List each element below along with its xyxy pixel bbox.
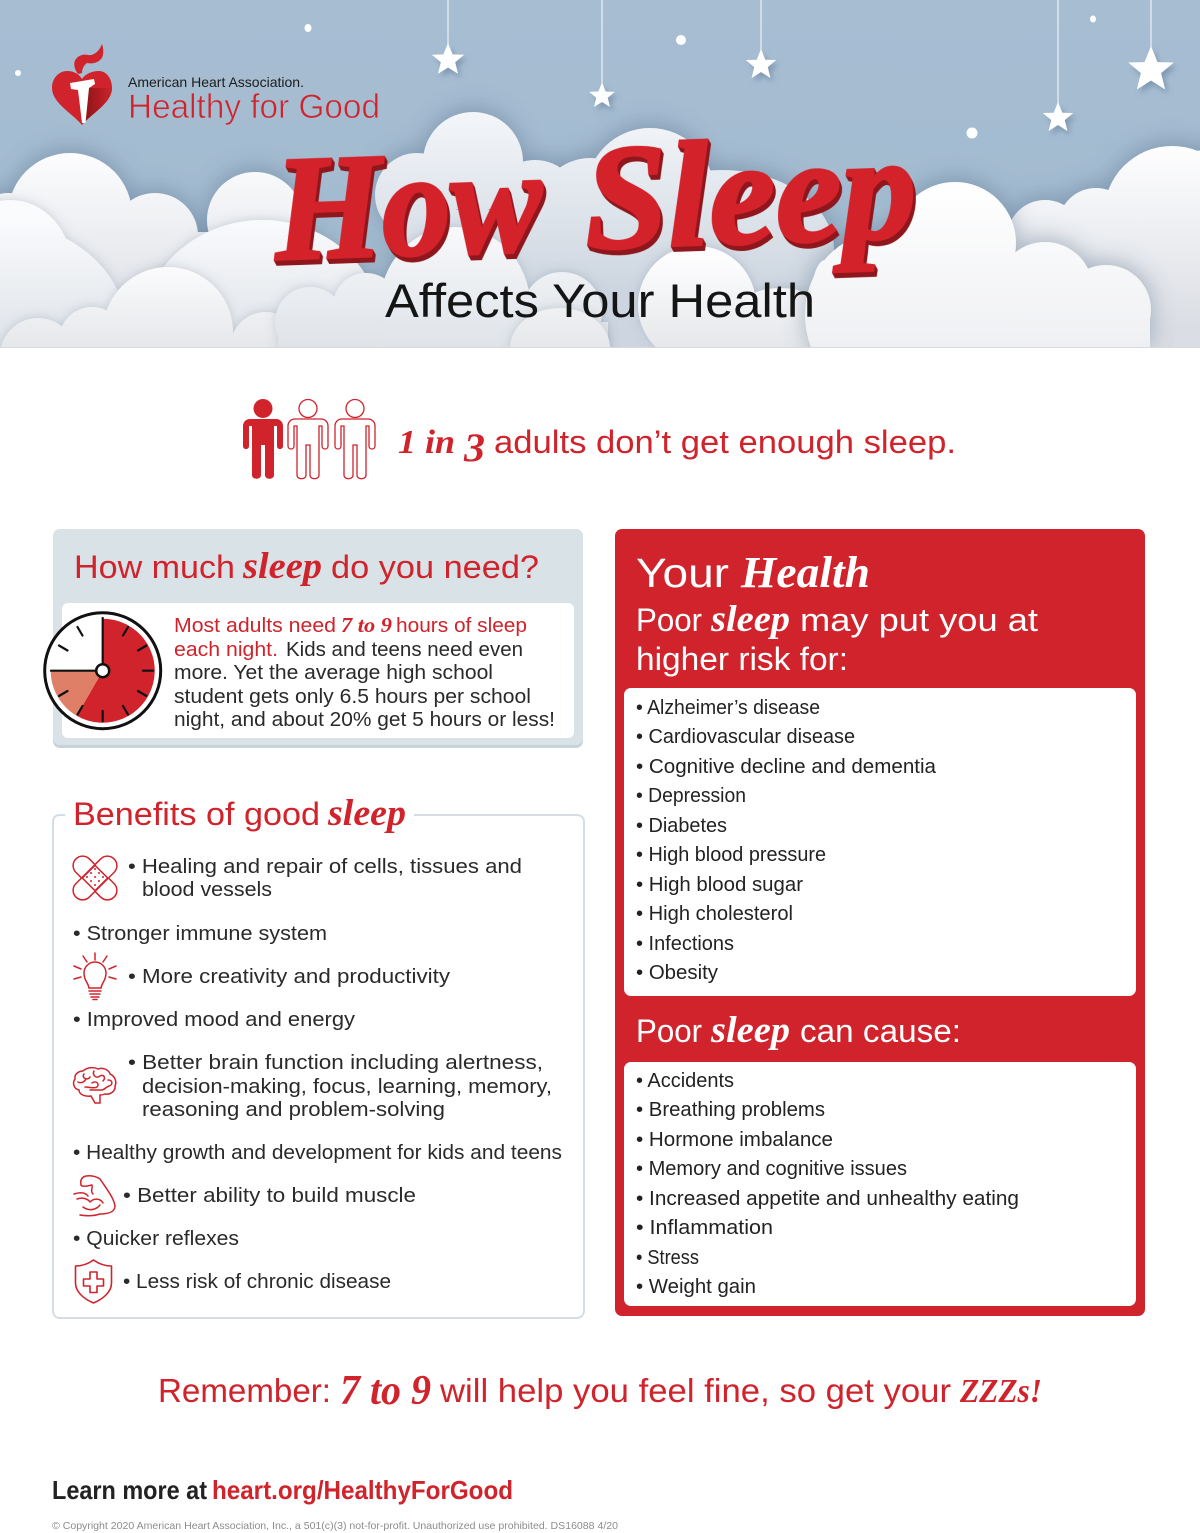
subheading: poor sleep can cause: Poor xyxy=(636,1013,702,1049)
logo: American Heart Association Healthy for Good: Healthy for Good xyxy=(128,88,380,126)
subheading: poor sleep risk xyxy=(636,599,1038,677)
list: causes: • Memory and cognitive issues xyxy=(636,1157,907,1180)
list: risks: • Depression xyxy=(636,784,746,807)
icon: light bulb xyxy=(74,953,116,1000)
title: How Sleep: Sleep xyxy=(581,104,919,281)
statistic: 1 in 3 adults: adults don’t get enough sleep. xyxy=(494,424,956,460)
icon: heart and torch xyxy=(52,44,112,125)
text: sleep needs: Kids and teens need even xyxy=(286,638,523,661)
list: risks: • High blood sugar xyxy=(636,873,803,896)
benefit text: • Healthy growth and development for kids and teens xyxy=(73,1141,562,1164)
subheading: poor sleep risk: sleep xyxy=(710,599,790,640)
heading: how much sleep: How much xyxy=(74,549,235,585)
heading: benefits xyxy=(73,793,406,834)
subheading: poor sleep risk: may put you at xyxy=(800,602,1038,638)
icon: three people xyxy=(243,399,375,479)
benefit text: • Healing and repair of cells, tissues and xyxy=(128,855,522,878)
statistic: 1 in 3 adults: 3 xyxy=(463,425,485,470)
list: risks: • High cholesterol xyxy=(636,902,793,925)
benefit text: reasoning and problem-solving xyxy=(142,1098,445,1121)
icon: bandage xyxy=(69,852,121,904)
benefit text: • Less risk of chronic disease xyxy=(123,1270,391,1293)
panel: how much sleep xyxy=(45,529,583,748)
list: causes: • Inflammation xyxy=(636,1216,773,1239)
subheading: poor sleep can cause: sleep xyxy=(710,1010,790,1051)
header illustration: night sky and clouds xyxy=(0,0,1200,348)
panel: benefits of good sleep xyxy=(53,793,584,1318)
closing message: Remember: xyxy=(158,1372,331,1409)
benefit text: • Quicker reflexes xyxy=(73,1227,239,1250)
list: risks: • Infections xyxy=(636,932,734,955)
call to action: learn more xyxy=(52,1475,513,1505)
closing message: 7 to 9 xyxy=(340,1368,431,1414)
subheading: poor sleep can cause: can cause: xyxy=(800,1013,961,1049)
icon: brain xyxy=(74,1068,116,1103)
list: risks: • Diabetes xyxy=(636,814,727,837)
benefit text: • Stronger immune system xyxy=(73,922,327,945)
benefit text: decision-making, focus, learning, memory, xyxy=(142,1075,552,1098)
list: causes: • Weight gain xyxy=(636,1275,756,1298)
call to action: learn more: heart.org/HealthyForGood xyxy=(212,1475,513,1505)
list: risks: • High blood pressure xyxy=(636,843,826,866)
text: sleep needs xyxy=(174,613,555,731)
list: causes: • Breathing problems xyxy=(636,1098,825,1121)
list: risks: • Alzheimer’s disease xyxy=(636,696,820,719)
list: risks: • Cardiovascular disease xyxy=(636,725,855,748)
text: sleep needs: more. Yet the average high school xyxy=(174,661,493,684)
benefit text: • Improved mood and energy xyxy=(73,1008,356,1031)
closing message: ZZZs! xyxy=(959,1373,1042,1410)
list: causes: • Accidents xyxy=(636,1069,734,1092)
list: causes: • Increased appetite and unhealthy eating xyxy=(636,1187,1019,1210)
statistic: 1 in 3 adults xyxy=(243,399,956,479)
heading: your health: Your xyxy=(636,550,729,596)
closing message xyxy=(158,1368,1042,1414)
heading: how much sleep: do you need? xyxy=(331,549,539,585)
benefit text: • Better brain function including alertness, xyxy=(128,1051,543,1074)
logo: American Heart Association Healthy for Good: American Heart Association. xyxy=(128,74,304,90)
list: causes xyxy=(624,1062,1136,1306)
icon: flexed muscle xyxy=(74,1176,115,1216)
list: causes: • Stress xyxy=(636,1246,699,1269)
subheading: poor sleep risk: Poor xyxy=(636,602,702,638)
subtitle: Affects Your Health xyxy=(385,274,815,327)
call to action: learn more: Learn more at xyxy=(52,1475,207,1505)
panel: your health xyxy=(615,529,1145,1316)
list: causes: • Hormone imbalance xyxy=(636,1128,833,1151)
text: sleep needs: hours of sleep xyxy=(396,614,527,637)
list: risks: • Cognitive decline and dementia xyxy=(636,755,937,778)
title: How Sleep xyxy=(270,104,919,292)
title: How Sleep: How xyxy=(270,117,546,292)
benefit text: blood vessels xyxy=(142,878,272,901)
icon: clock xyxy=(45,613,161,729)
subheading: poor sleep risk: higher risk for: xyxy=(636,641,848,677)
closing message: will help you feel fine, so get your xyxy=(439,1372,951,1409)
text: sleep needs: night, and about 20% get 5 hours or less! xyxy=(174,708,555,731)
statistic: 1 in 3 adults: 1 in xyxy=(398,424,455,461)
heading: how much sleep xyxy=(74,546,539,587)
text: sleep needs: each night. xyxy=(174,638,278,661)
heading: your health: Health xyxy=(740,548,870,597)
text: sleep needs: 7 to 9 xyxy=(341,613,393,637)
logo: American Heart Association Healthy for Good xyxy=(52,44,380,126)
heading: benefits: sleep xyxy=(327,793,406,834)
text: sleep needs: Most adults need xyxy=(174,614,336,637)
list: risks: • Obesity xyxy=(636,961,719,984)
list: risks xyxy=(624,688,1136,996)
subheading: poor sleep can cause xyxy=(636,1010,961,1051)
text: sleep needs: student gets only 6.5 hours per school xyxy=(174,685,531,708)
heading: benefits: Benefits of good xyxy=(73,796,320,832)
heading: your health xyxy=(636,548,870,597)
benefit text: • Better ability to build muscle xyxy=(123,1184,416,1207)
heading: how much sleep: sleep xyxy=(242,546,322,587)
benefit text: • More creativity and productivity xyxy=(128,965,451,988)
copyright: © Copyright 2020 American Heart Association, Inc., a 501(c)(3) not-for-profit. Unauthorized use prohibited. DS16088 4/20 xyxy=(52,1520,618,1532)
icon: shield with cross xyxy=(76,1260,112,1303)
